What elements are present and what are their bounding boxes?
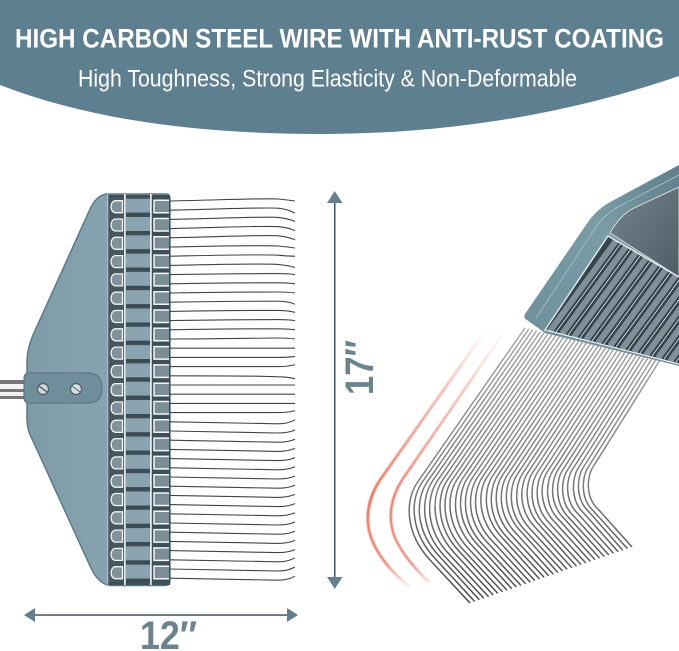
- rake head front view: [0, 194, 170, 586]
- arrow: 17 inch height: [327, 191, 342, 589]
- screw: [38, 384, 48, 394]
- straight wire tines: [170, 199, 295, 580]
- dark slatted grille: [545, 237, 679, 365]
- wire clamp rows: [107, 194, 170, 585]
- handle socket: [24, 373, 102, 403]
- subtitle: High Toughness, Strong Elasticity & Non-Deformable: [78, 66, 577, 92]
- header banner: [0, 0, 679, 134]
- teal head shell: [524, 165, 679, 366]
- rake head angled view: [524, 165, 679, 370]
- shell crease line: [536, 175, 679, 318]
- label: 17 inch: 17″: [338, 340, 382, 395]
- grille bright edge: [545, 236, 679, 364]
- arrow: 12 inch width: [24, 608, 298, 622]
- steel handle: [0, 380, 26, 399]
- upper grey panel: [610, 187, 679, 277]
- screw: [70, 384, 82, 394]
- head body plate: [27, 194, 170, 586]
- bent wire tines: [409, 328, 660, 603]
- red motion streaks: [368, 327, 502, 587]
